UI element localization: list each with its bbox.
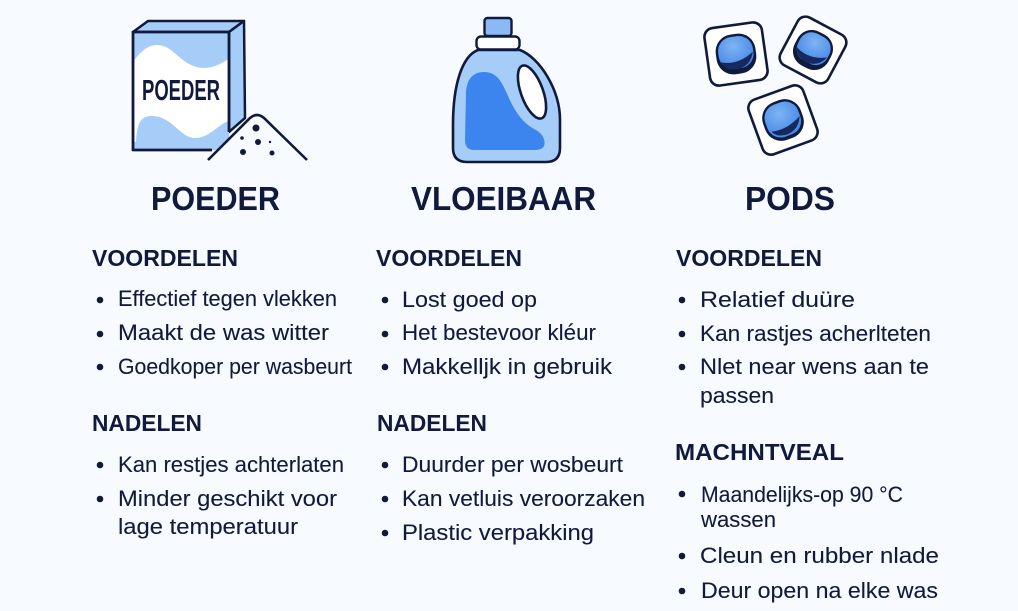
list: nadelen poeder	[97, 452, 344, 539]
list: nadelen vloeibaar: Plastic verpakking	[402, 520, 594, 545]
list: machine onderhoud: Maandelijks-op 90 °C	[701, 482, 903, 507]
list: nadelen poeder: lage temperatuur	[118, 514, 299, 539]
subheading: voordelen: VOORDELEN	[376, 245, 522, 271]
heading: vloeibaar: VLOEIBAAR	[411, 180, 596, 217]
list: voordelen vloeibaar: Het bestevoor kléur	[402, 320, 596, 345]
list: voordelen vloeibaar: Makkelljk in gebruik	[402, 354, 613, 379]
list: nadelen vloeibaar	[382, 452, 645, 545]
heading: pods: PODS	[745, 180, 835, 217]
list: voordelen poeder: Effectief tegen vlekken	[118, 286, 337, 311]
list: machine onderhoud: wassen	[700, 507, 776, 532]
column: poeder	[92, 180, 353, 539]
list: nadelen vloeibaar: Kan vetluis veroorzaken	[402, 486, 645, 511]
subheading: nadelen: NADELEN	[377, 410, 487, 436]
subheading: voordelen: VOORDELEN	[92, 245, 238, 271]
list: machine onderhoud: Deur open na elke was	[701, 578, 938, 603]
list: voordelen vloeibaar: Lost goed op	[402, 287, 537, 312]
list: machine onderhoud	[679, 482, 939, 603]
list: voordelen poeder: Maakt de was witter	[118, 320, 330, 345]
subheading: nadelen: NADELEN	[92, 410, 202, 436]
pod left	[703, 21, 769, 87]
icon: powder box with pile	[133, 21, 307, 160]
subheading: voordelen: VOORDELEN	[676, 245, 822, 271]
icon: liquid detergent bottle	[453, 18, 560, 162]
box label: POEDER	[142, 75, 220, 107]
column: pods	[675, 180, 939, 603]
heading: poeder: POEDER	[151, 180, 280, 217]
column: vloeibaar	[376, 180, 645, 545]
pod bottom	[746, 83, 820, 157]
list: voordelen poeder: Goedkoper per wasbeurt	[118, 354, 353, 379]
list: voordelen pods: Nlet near wens aan te	[700, 354, 929, 379]
list: nadelen poeder: Kan restjes achterlaten	[118, 452, 344, 477]
list: nadelen poeder: Minder geschikt voor	[118, 486, 338, 511]
list: voordelen pods: passen	[700, 383, 774, 408]
icon: detergent pods	[703, 13, 850, 157]
pod right	[776, 13, 850, 87]
list: voordelen vloeibaar	[382, 287, 613, 379]
list: voordelen poeder	[97, 286, 353, 379]
list: voordelen pods	[679, 287, 931, 408]
list: nadelen vloeibaar: Duurder per wosbeurt	[402, 452, 624, 477]
subheading: machnteveal: MACHNTVEAL	[675, 439, 844, 465]
list: voordelen pods: Relatief duüre	[700, 287, 855, 312]
list: voordelen pods: Kan rastjes acherlteten	[700, 321, 931, 346]
list: machine onderhoud: Cleun en rubber nlade	[700, 543, 939, 568]
